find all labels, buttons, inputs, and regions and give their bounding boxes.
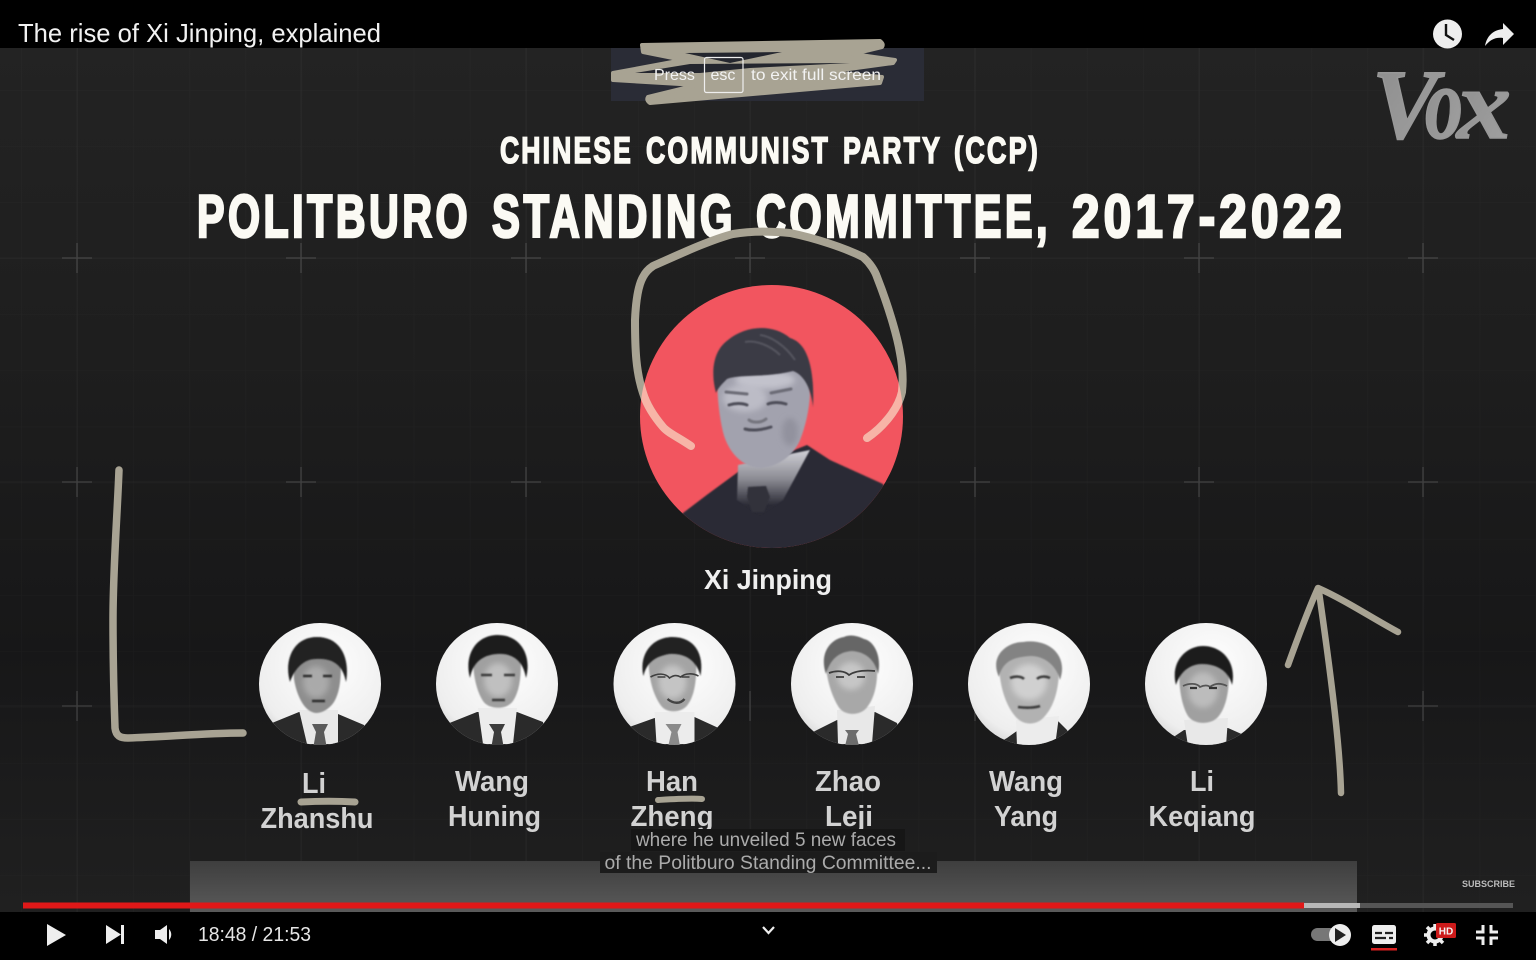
icon: exit fullscreen [1476, 925, 1498, 945]
esc banner backdrop [611, 48, 924, 101]
icon: share arrow [1485, 23, 1514, 46]
top bar [0, 0, 1536, 48]
portrait: Wang Yang [968, 623, 1090, 754]
names of the six members: Han [646, 766, 698, 798]
heading: Politburo Standing Committee: 2017-2022 [1072, 183, 1346, 250]
portrait: Zhao Leji [791, 623, 913, 754]
time code: 18:48 / 21:53 [198, 924, 311, 946]
label: Xi Jinping: Xi Jinping [704, 564, 832, 595]
names of the six members: Li [302, 768, 326, 800]
icon: chevron [763, 927, 774, 933]
icon: captions [1371, 925, 1397, 950]
video title: The rise of Xi Jinping, explained [18, 18, 381, 48]
names of the six members: Li [1190, 766, 1214, 798]
logo: Vox: x [1455, 49, 1511, 160]
heading: Chinese Communist Party: (CCP) [954, 130, 1040, 171]
heading: Chinese Communist Party: CHINESE [500, 130, 633, 171]
heading: Chinese Communist Party: COMMUNIST [646, 130, 830, 171]
icon: settings with HD badge: HD [1439, 926, 1453, 938]
hair [713, 328, 813, 407]
portrait: Xi Jinping [640, 285, 910, 560]
hand-drawn circle around Xi Jinping [635, 232, 903, 446]
names of the six members: Keqiang [1148, 801, 1256, 833]
heading: Chinese Communist Party [500, 130, 1040, 171]
captions [600, 829, 937, 874]
portrait: Li Keqiang [1145, 623, 1267, 754]
underline: Han [658, 799, 702, 800]
logo: Vox: V [1372, 49, 1445, 160]
names of the six members: Zhao [815, 766, 881, 798]
portrait: Li Zhanshu [259, 623, 381, 754]
esc banner text: to exit full screen [751, 67, 881, 84]
eyes, nose and mouth [726, 389, 791, 430]
captions: of the Politburo Standing Committee... [604, 853, 932, 874]
names of the six members: Huning [448, 801, 541, 833]
icon: watch later clock [1433, 20, 1462, 48]
icon: next [106, 925, 124, 944]
esc banner text: Press [654, 67, 695, 84]
suit [682, 444, 884, 548]
captions: where he unveiled 5 new faces [635, 830, 896, 851]
icon: autoplay toggle [1311, 924, 1351, 946]
hand-drawn L bracket [113, 470, 243, 738]
logo: Vox: o [1425, 46, 1463, 161]
portrait: Wang Huning [436, 623, 558, 754]
hand-drawn up arrow [1288, 588, 1398, 793]
names of the six members [260, 766, 1256, 835]
names of the six members: Yang [994, 801, 1058, 833]
face [716, 370, 810, 466]
esc banner text [654, 58, 881, 92]
icon: play [47, 924, 66, 946]
icon: settings with HD badge [1424, 923, 1456, 946]
control bar [0, 912, 1536, 960]
names of the six members: Zhanshu [260, 803, 374, 835]
portrait: Han Zheng [614, 623, 736, 754]
heading: Politburo Standing Committee: COMMITTEE, [756, 183, 1051, 250]
heading: Politburo Standing Committee [197, 183, 1346, 250]
progress bar [23, 902, 1513, 908]
heading: Chinese Communist Party: PARTY [843, 130, 942, 171]
gray lower band [190, 861, 1357, 912]
heading: Politburo Standing Committee: STANDING [492, 183, 736, 250]
subscribe label: SUBSCRIBE [1462, 879, 1515, 890]
names of the six members: Zheng [630, 801, 714, 833]
tie [747, 486, 770, 512]
underline: Li [301, 798, 355, 806]
logo: Vox [1372, 46, 1511, 161]
names of the six members: Wang [989, 766, 1063, 798]
shirt [736, 449, 810, 504]
heading: Politburo Standing Committee: POLITBURO [197, 183, 471, 250]
esc banner text: esc [710, 67, 735, 84]
scribble over esc banner [613, 41, 895, 103]
names of the six members: Wang [455, 766, 529, 798]
icon: volume [155, 925, 171, 944]
names of the six members: Leji [825, 801, 873, 833]
